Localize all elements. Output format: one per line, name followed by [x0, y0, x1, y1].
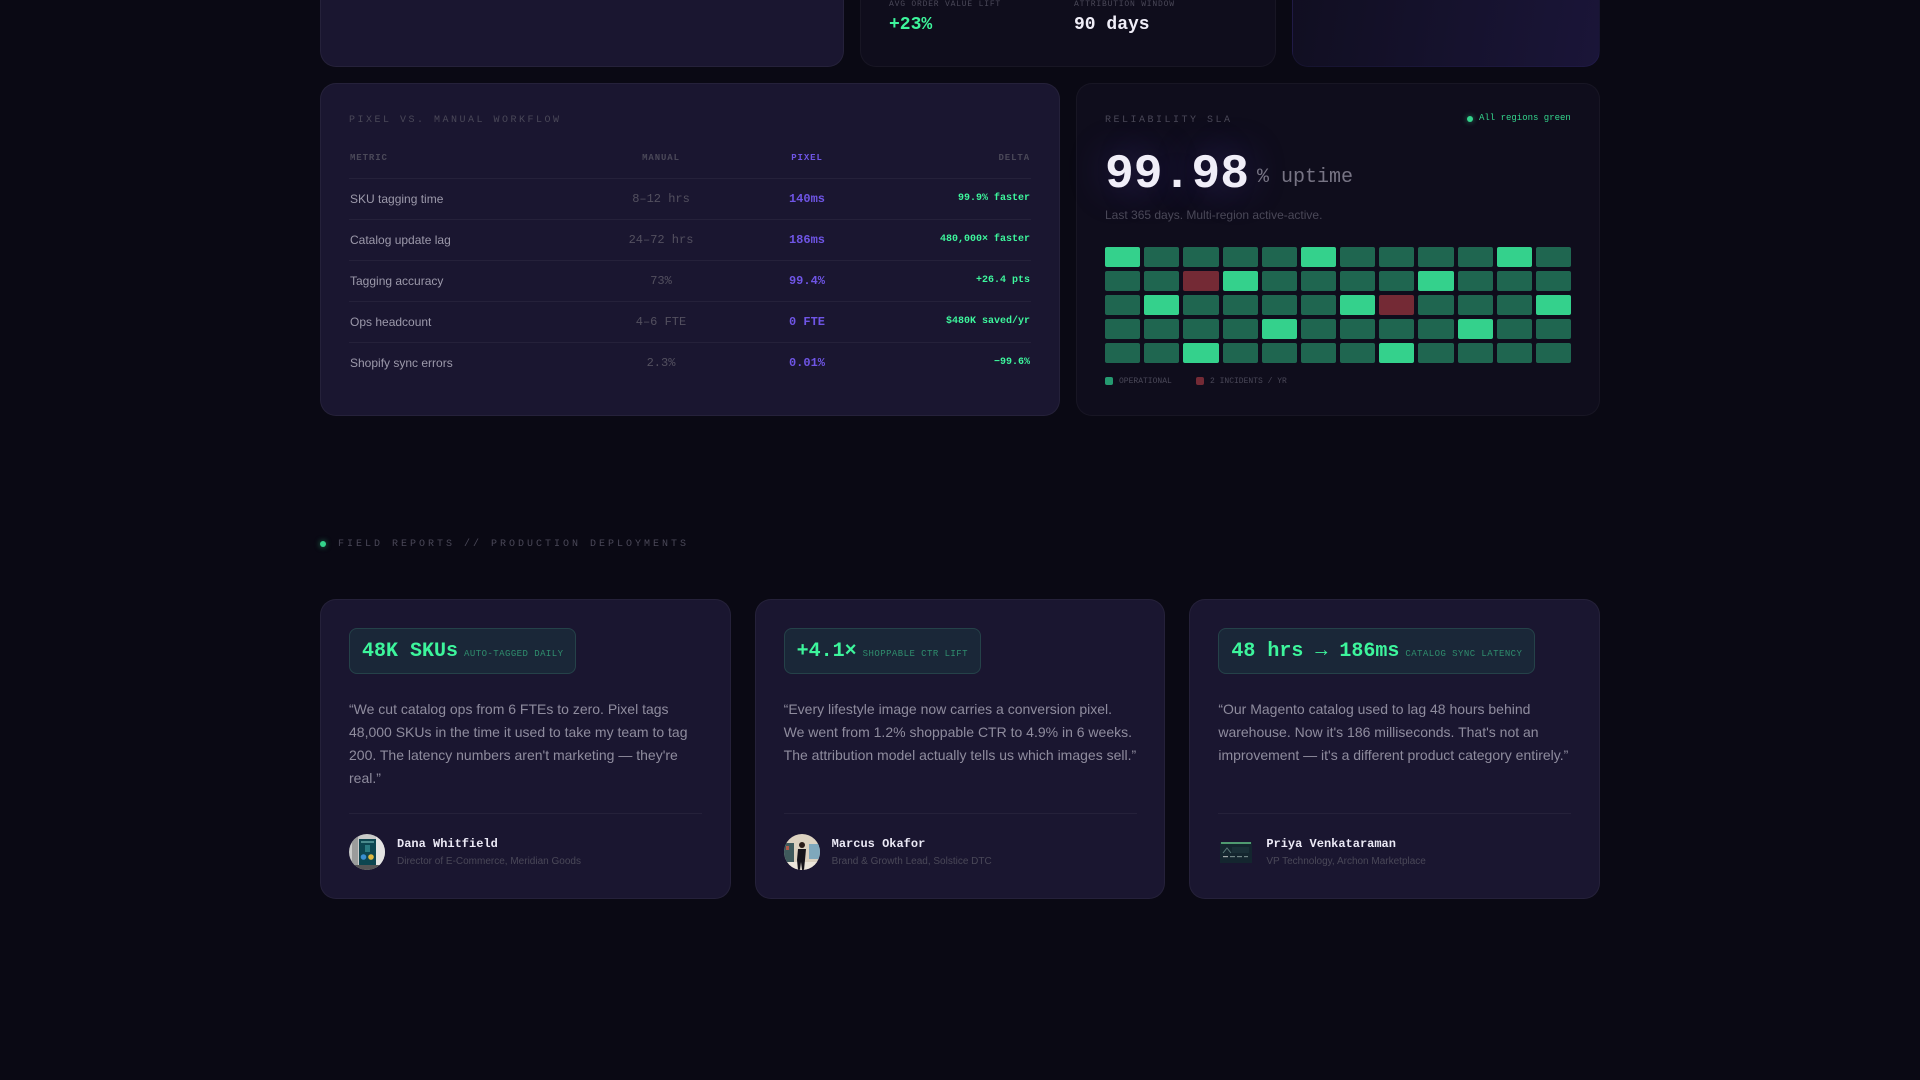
status dot	[1467, 116, 1473, 122]
panel: top middle stats	[860, 0, 1276, 66]
role: Director of E-Commerce, Meridian Goods	[397, 856, 581, 867]
eyebrow dot	[320, 541, 326, 547]
quote: 200. The latency numbers aren't marketing — they're	[349, 747, 678, 763]
quote: The attribution model actually tells us which images sell.”	[784, 747, 1136, 763]
metric badge: 48K SKUs: AUTO-TAGGED DAILY	[464, 649, 563, 659]
column head: pixel: PIXEL	[791, 153, 823, 163]
quote: We went from 1.2% shoppable CTR to 4.9% in 6 weeks.	[784, 724, 1132, 740]
avatar: person in store photo	[784, 834, 820, 870]
table row: SKU tagging time: SKU tagging time	[350, 192, 443, 206]
legend label: incidents: 2 INCIDENTS / YR	[1210, 377, 1287, 386]
column head: manual: MANUAL	[642, 153, 680, 163]
stat: average order value lift	[889, 0, 1001, 35]
uptime figure: 99.98: 99.98	[1105, 148, 1249, 202]
legend swatch: operational	[1105, 377, 1113, 385]
metric badge: +4.1x: +4.1×	[797, 640, 857, 663]
table row: tagging accuracy: +26.4 pts	[976, 275, 1030, 286]
table row: ops headcount: 4–6 FTE	[636, 315, 686, 329]
eyebrow text: FIELD REPORTS // PRODUCTION DEPLOYMENTS	[338, 539, 689, 550]
name: Priya Venkataraman	[1266, 837, 1396, 851]
stat value: +23%: +23%	[889, 15, 932, 35]
table row: SKU tagging time	[349, 178, 1031, 219]
legend: operational and incidents	[1105, 377, 1287, 386]
heading: reliability SLA: RELIABILITY SLA	[1105, 115, 1233, 126]
heading: pixel vs manual workflow: PIXEL VS. MANUAL WORKFLOW	[349, 115, 562, 126]
stat: attribution window	[1074, 0, 1175, 35]
table row: shopify sync errors: 2.3%	[647, 356, 675, 370]
table row: SKU tagging time: 140ms	[789, 192, 825, 206]
table row: ops headcount: $480K saved/yr	[946, 316, 1030, 327]
caption: last 365 days: Last 365 days. Multi-region active-active.	[1105, 208, 1322, 222]
name: Marcus Okafor	[832, 837, 925, 851]
status badge: all regions green	[1464, 113, 1571, 125]
table row: ops headcount	[349, 301, 1031, 342]
quote	[349, 701, 688, 786]
panel: top right gradient card (cropped)	[1292, 0, 1600, 66]
stat value: 90 days: 90 days	[1074, 15, 1150, 35]
table row: shopify sync errors: 0.01%	[789, 356, 825, 370]
table row: catalog update lag: 480,000× faster	[940, 234, 1030, 245]
legend swatch: incidents	[1196, 377, 1204, 385]
avatar: phone display photo	[349, 834, 385, 870]
metric badge: +4.1x: SHOPPABLE CTR LIFT	[863, 649, 968, 659]
metric badge: 48K SKUs: 48K SKUs	[362, 640, 458, 663]
section eyebrow: field reports	[317, 538, 689, 550]
panel: top left card (cropped)	[320, 0, 844, 66]
table row: catalog update lag: Catalog update lag	[350, 233, 451, 247]
quote: warehouse. Now it's 186 milliseconds. That's not an	[1218, 724, 1539, 740]
metric badge: 48K SKUs	[349, 628, 576, 674]
quote: “Our Magento catalog used to lag 48 hours behind	[1218, 701, 1530, 717]
testimonial card: Dana Whitfield	[320, 599, 731, 899]
panel: pixel vs manual workflow table	[320, 83, 1060, 416]
uptime unit: % uptime	[1257, 166, 1353, 188]
testimonial card: Marcus Okafor	[755, 599, 1165, 899]
quote: real.”	[349, 770, 381, 786]
table header row	[350, 153, 1030, 163]
table row: tagging accuracy: 73%	[650, 274, 672, 288]
table row: shopify sync errors: Shopify sync errors	[350, 356, 453, 370]
table row: tagging accuracy	[349, 260, 1031, 301]
table row: tagging accuracy: Tagging accuracy	[350, 274, 443, 288]
table row: catalog update lag: 186ms	[789, 233, 825, 247]
quote: 48,000 SKUs in the time it used to take my team to tag	[349, 724, 688, 740]
legend label: operational: OPERATIONAL	[1119, 377, 1172, 386]
role: Brand & Growth Lead, Solstice DTC	[832, 856, 992, 867]
table row: SKU tagging time: 99.9% faster	[958, 193, 1030, 204]
panel: reliability SLA	[1076, 83, 1600, 416]
divider	[349, 813, 702, 814]
table row: catalog update lag: 24–72 hrs	[629, 233, 693, 247]
role: VP Technology, Archon Marketplace	[1266, 856, 1426, 867]
avatar: dashboard screenshot	[1220, 842, 1252, 863]
table row: shopify sync errors	[349, 342, 1031, 383]
testimonial card: Priya Venkataraman	[1189, 599, 1600, 899]
quote: “We cut catalog ops from 6 FTEs to zero. Pixel tags	[349, 701, 669, 717]
quote	[784, 701, 1136, 763]
heatmap: monthly uptime grid	[1105, 247, 1571, 363]
metric badge: +4.1x	[784, 628, 981, 674]
status text: All regions green	[1479, 113, 1571, 123]
quote: “Every lifestyle image now carries a conversion pixel.	[784, 701, 1112, 717]
table row: ops headcount: 0 FTE	[789, 315, 825, 329]
name: Dana Whitfield	[397, 837, 498, 851]
metric badge: 48 hrs to 186ms: CATALOG SYNC LATENCY	[1405, 649, 1522, 659]
column head: metric: METRIC	[350, 153, 388, 163]
metric badge: 48 hrs to 186ms: 48 hrs → 186ms	[1231, 640, 1399, 663]
stat label: avg order value lift: AVG ORDER VALUE LIFT	[889, 0, 1001, 9]
table row: SKU tagging time: 8–12 hrs	[632, 192, 690, 206]
metric badge: 48 hrs to 186ms	[1218, 628, 1535, 674]
divider	[784, 813, 1137, 814]
divider	[1218, 813, 1571, 814]
table row: ops headcount: Ops headcount	[350, 315, 431, 329]
quote: improvement — it's a different product category entirely.”	[1218, 747, 1568, 763]
quote	[1218, 701, 1568, 763]
table row: catalog update lag	[349, 219, 1031, 260]
column head: delta: DELTA	[998, 153, 1030, 163]
table row: tagging accuracy: 99.4%	[789, 274, 825, 288]
stat label: attribution window: ATTRIBUTION WINDOW	[1074, 0, 1175, 9]
table row: shopify sync errors: −99.6%	[994, 357, 1030, 368]
